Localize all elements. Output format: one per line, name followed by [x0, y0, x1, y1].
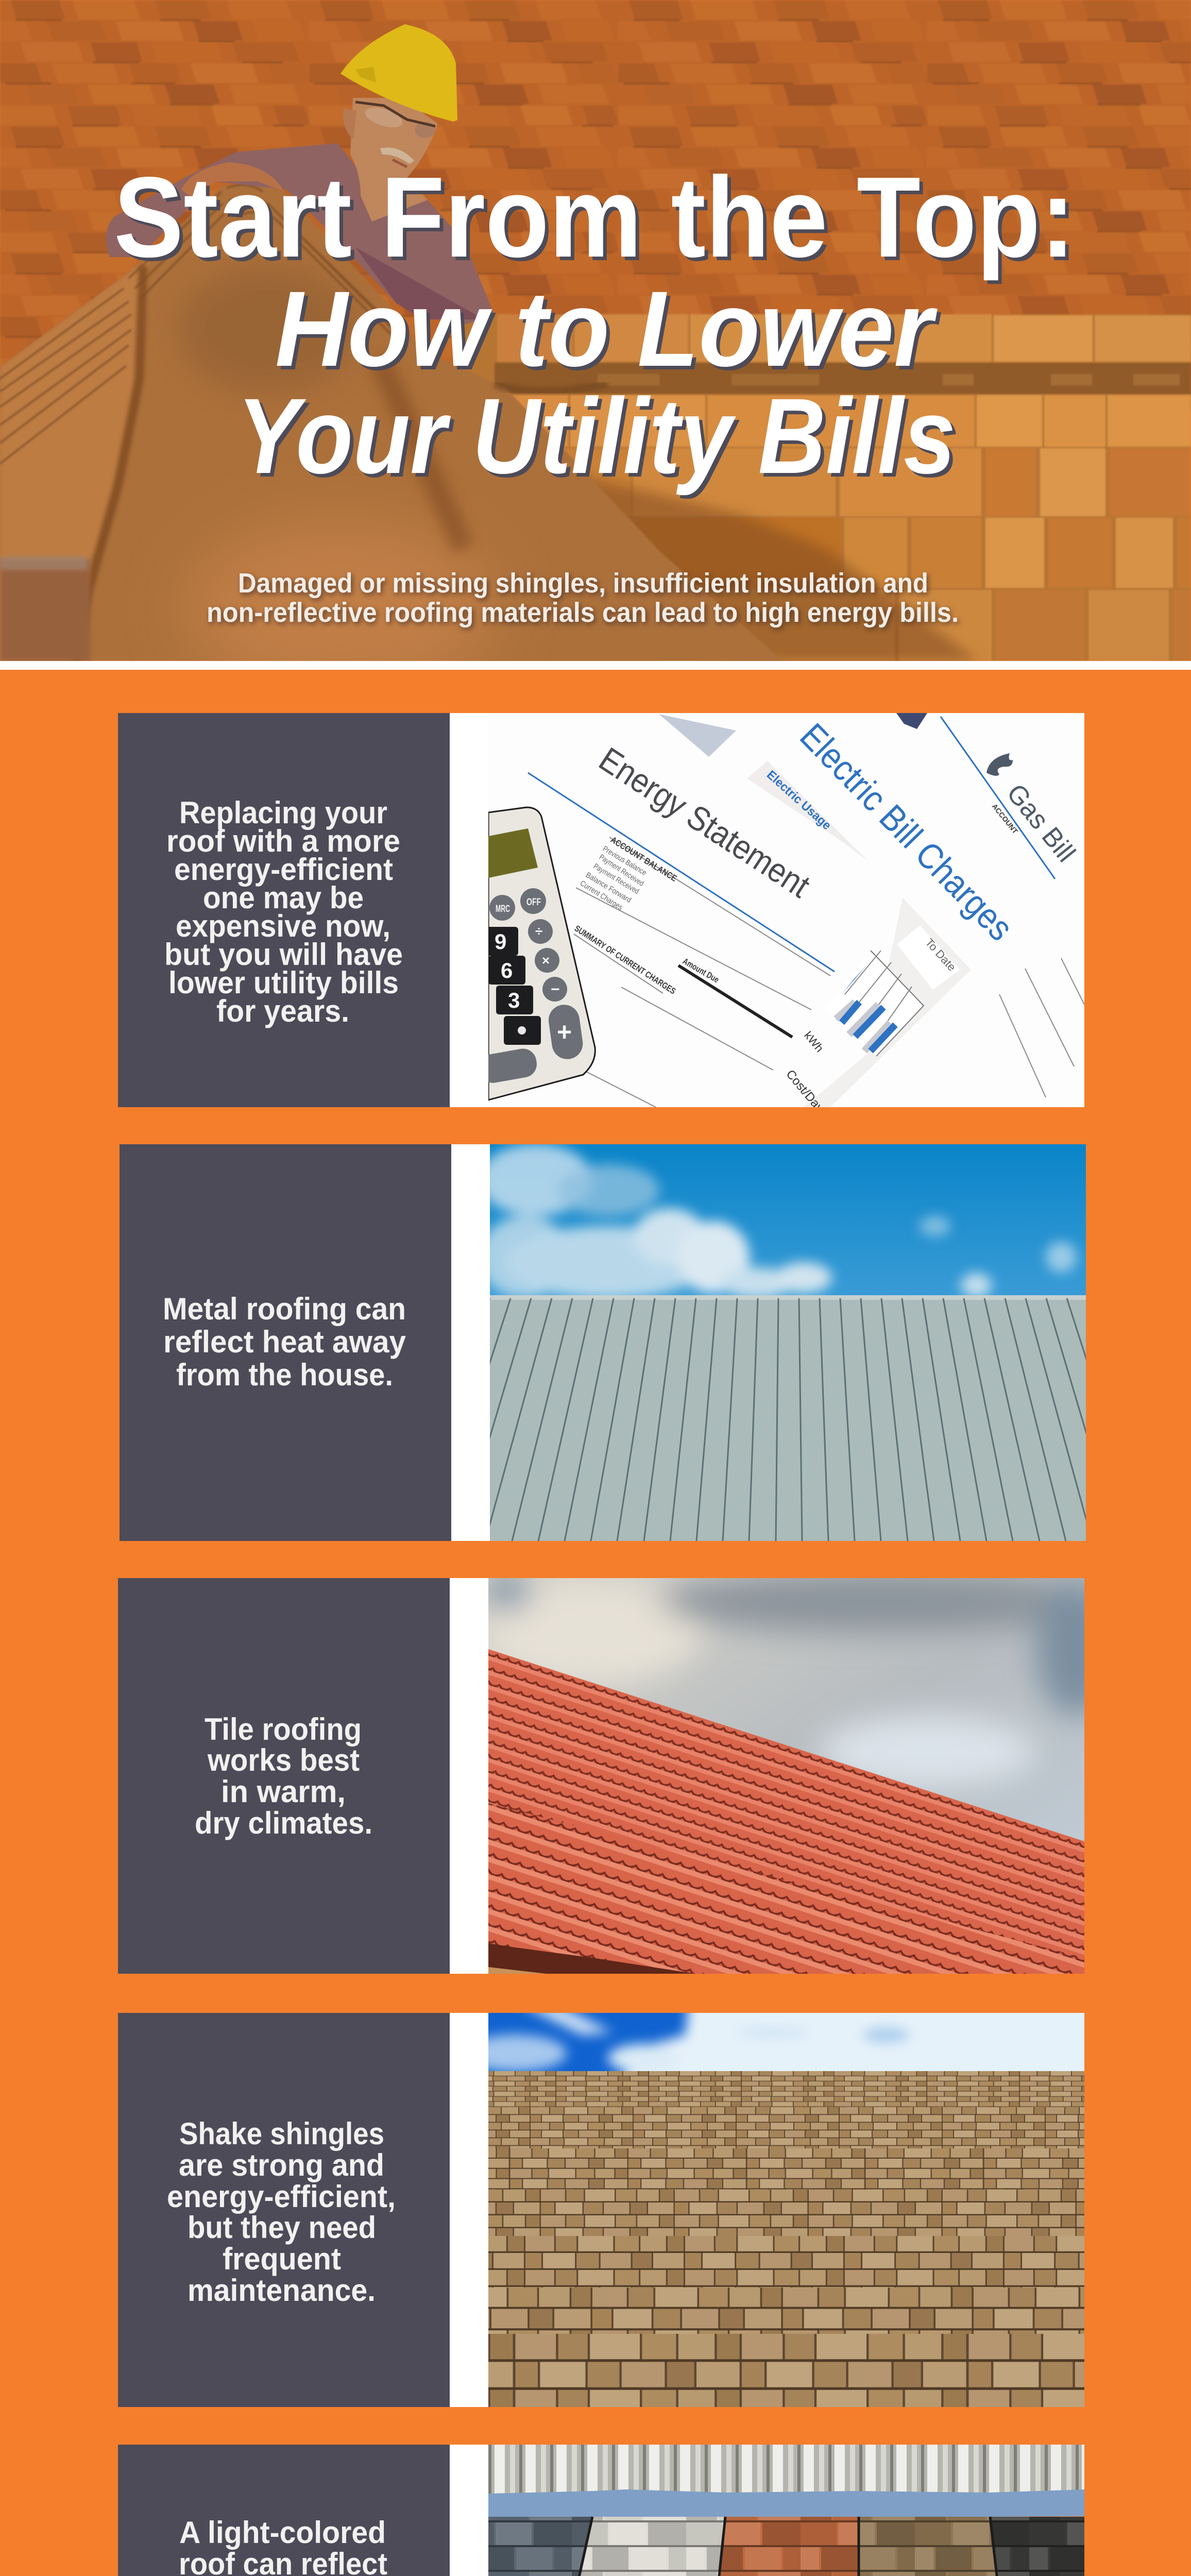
- panel 1: replacing your roof: [118, 713, 1084, 1115]
- safety glasses: [355, 102, 435, 138]
- grey shingle column: [488, 2517, 592, 2576]
- small document text: ACCOUNT: [991, 802, 1019, 836]
- photo: metal roof under blue sky: [406, 1144, 1145, 1541]
- calculator: 6: [501, 958, 513, 982]
- ridge cap: [0, 181, 783, 661]
- photo: energy bills and calculator: kWh: [802, 1029, 826, 1055]
- text block: replacing your roof: Replacing your: [179, 795, 387, 830]
- calculator: OFF: [526, 897, 541, 908]
- text block: shake shingles: energy-efficient,: [167, 2179, 396, 2214]
- text block: light and dark roofs: A light-colored: [179, 2515, 386, 2550]
- corrugated metal wall: [488, 2445, 1084, 2496]
- text block: metal roofing: Metal roofing can: [163, 1292, 406, 1326]
- title: How to Lower: [275, 269, 938, 389]
- small document text: Amount Due: [681, 956, 721, 985]
- terracotta shingle column: [691, 2517, 859, 2576]
- title: Start From the Top:: [114, 154, 1075, 281]
- yellow hard hat: [341, 24, 457, 122]
- subtitle: non-reflective roofing materials can lead to high energy bills.: [207, 597, 959, 628]
- neck and face: [350, 98, 438, 222]
- text block: shake shingles: Shake shingles: [179, 2116, 384, 2151]
- text block: shake shingles: maintenance.: [188, 2273, 376, 2308]
- photo: energy bills and calculator: Previous Balance: [601, 844, 648, 877]
- near shingle rows: [464, 314, 1191, 661]
- panel 4: shake shingles: [118, 1989, 1133, 2407]
- chart card: [804, 897, 971, 1107]
- shirt: [106, 143, 495, 325]
- photo: energy bills and calculator: Cost/Day: [783, 1067, 827, 1115]
- text block: metal roofing: reflect heat away: [163, 1325, 406, 1359]
- small document text: SUMMARY OF CURRENT CHARGES: [573, 923, 677, 996]
- calculator: 3: [508, 988, 520, 1012]
- text block: tile roofing: in warm,: [221, 1774, 346, 1809]
- blurred lower-left corner: [0, 559, 90, 661]
- text block: light and dark roofs: [118, 2445, 450, 2576]
- calculator: [477, 807, 595, 1100]
- calculator: −: [551, 981, 560, 998]
- subtitle: [207, 568, 959, 628]
- text block: tile roofing: dry climates.: [195, 1806, 372, 1840]
- text block: metal roofing: from the house.: [176, 1358, 393, 1392]
- moustache: [380, 147, 414, 164]
- document headings: Gas Bill: [1001, 778, 1081, 868]
- white spacer: [450, 2013, 488, 2407]
- white spacer: [450, 1578, 488, 1974]
- calculator: MRC: [496, 904, 510, 914]
- white shingle column: [520, 2517, 725, 2576]
- text block: shake shingles: are strong and: [179, 2148, 384, 2182]
- dark seam in ridge: [76, 266, 143, 661]
- text block: replacing your roof: for years.: [216, 994, 349, 1028]
- text block: replacing your roof: lower utility bills: [168, 965, 399, 1000]
- clouds: [464, 1989, 1133, 2092]
- text block: replacing your roof: one may be: [203, 880, 364, 915]
- photo: shingle colour samples: [488, 2445, 1084, 2576]
- calculator: +: [557, 1018, 572, 1046]
- clouds: [484, 1571, 1118, 1788]
- subtitle: Damaged or missing shingles, insufficient insulation and: [238, 568, 928, 599]
- brown shingle column: [859, 2517, 1027, 2576]
- text block: tile roofing: [118, 1578, 450, 1974]
- panel 2: metal roofing: [120, 1144, 1145, 1541]
- bar chart on bill: [836, 951, 924, 1056]
- document headings: [592, 716, 1081, 948]
- white spacer: [450, 713, 488, 1107]
- dark shingle column: [990, 2517, 1084, 2576]
- title: [114, 154, 1075, 496]
- text block: tile roofing: Tile roofing: [205, 1712, 362, 1747]
- blue flashing: [488, 2489, 1084, 2519]
- shadow across near shingles: [589, 473, 977, 661]
- photo: energy bills and calculator: Payment Received: [598, 853, 645, 888]
- title: Your Utility Bills: [237, 377, 956, 496]
- clouds: [479, 1144, 1077, 1298]
- hero photo: roofer on shingled roof: [0, 0, 1191, 696]
- panel 3: tile roofing: [118, 1571, 1118, 1974]
- panel 5: light and dark roofs: [118, 2445, 1084, 2576]
- document headings: Electric Usage: [764, 768, 833, 833]
- shingle texture overlay: [488, 2517, 1084, 2576]
- calculator: ×: [542, 953, 550, 968]
- text block: shake shingles: but they need: [188, 2210, 376, 2245]
- fine shingle edges along ridge: [0, 185, 407, 464]
- rule lines on documents: [528, 717, 1055, 972]
- hand on ridge: [181, 162, 284, 198]
- calculator: 9: [495, 929, 506, 954]
- document headings: Electric Bill Charges: [792, 716, 1021, 948]
- white spacer: [451, 1144, 490, 1541]
- white divider band: [0, 661, 1191, 670]
- text block: shake shingles: [118, 2013, 450, 2407]
- small document text: [573, 802, 1019, 996]
- text block: replacing your roof: but you will have: [164, 937, 403, 972]
- standing seams: [406, 1298, 1145, 1541]
- text block: metal roofing: [120, 1144, 451, 1541]
- metal roof panel: [490, 1296, 1086, 1541]
- photo: energy bills and calculator: To Date: [923, 936, 959, 974]
- shake shingle rows: [488, 2071, 1084, 2107]
- text block: tile roofing: works best: [207, 1743, 360, 1777]
- photo: energy bills and calculator: [477, 713, 1084, 1115]
- column seams: [520, 2517, 1027, 2576]
- roofer figure: [106, 24, 495, 325]
- text block: replacing your roof: roof with a more: [166, 824, 400, 858]
- dark eave: [488, 1943, 695, 1974]
- document headings: Energy Statement: [592, 740, 817, 905]
- white spacer: [450, 2445, 488, 2576]
- photo: energy bills and calculator: Balance Forward: [584, 871, 633, 905]
- ridge soft light and shade: [0, 258, 495, 696]
- text block: shake shingles: frequent: [223, 2242, 341, 2276]
- photo: red tile roof under cloudy sky: [484, 1571, 1118, 1974]
- header: roofer photo banner with title: [0, 0, 1191, 696]
- calculator: ÷: [535, 923, 542, 939]
- photo: energy bills and calculator: Payment Received: [592, 862, 640, 896]
- small document text: ACCOUNT BALANCE: [609, 835, 678, 884]
- tile roof surface: [488, 1649, 1084, 1974]
- gas flame icon: [986, 753, 1013, 776]
- text block: replacing your roof: [118, 713, 450, 1107]
- photo: cedar shake roof: [464, 1989, 1133, 2407]
- photo: energy bills and calculator: Current Charges: [579, 879, 624, 912]
- text block: replacing your roof: energy-efficient: [174, 852, 393, 887]
- text block: replacing your roof: expensive now,: [176, 909, 390, 943]
